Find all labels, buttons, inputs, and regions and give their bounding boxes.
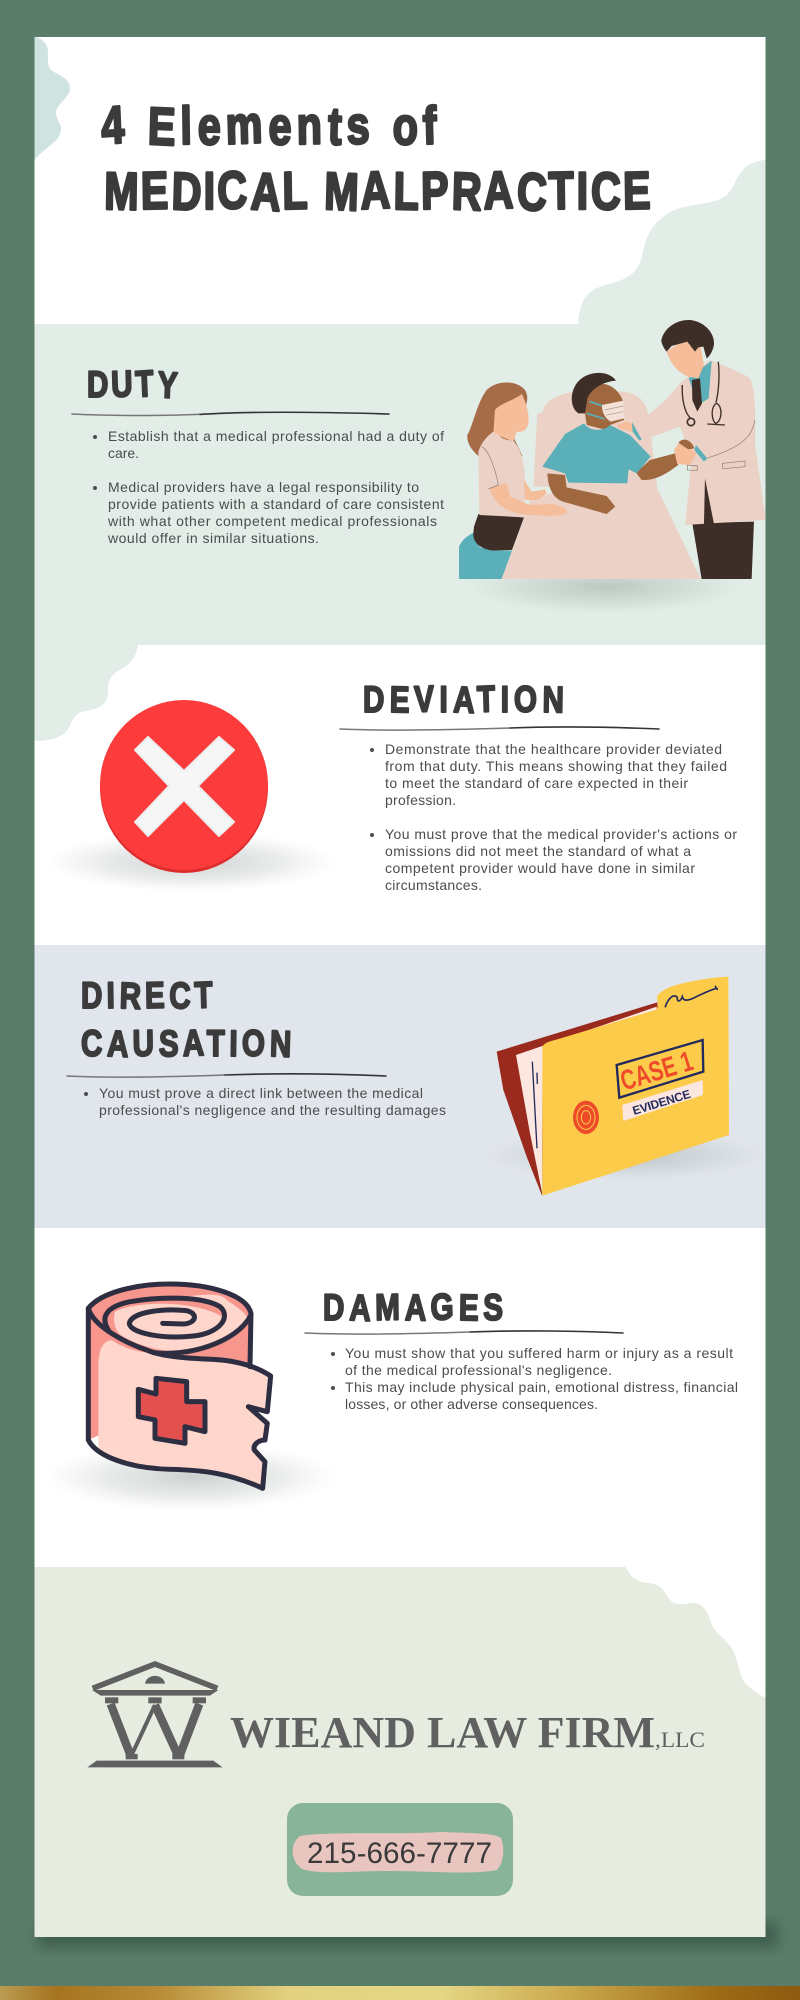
front wrap bbox=[98, 1340, 271, 1488]
companion bbox=[467, 382, 529, 551]
LLC suffix: ,LLC bbox=[655, 1727, 705, 1752]
gold strip bbox=[0, 1986, 800, 2000]
text: deviation bullets: competent provider would have done in similar bbox=[385, 860, 695, 876]
panel: damages bbox=[34, 1228, 766, 1567]
shadow bbox=[44, 832, 338, 892]
phone badge bbox=[287, 1803, 513, 1896]
text: deviation bullets: Demonstrate that the healthcare provider deviated bbox=[385, 741, 722, 757]
footer corner bbox=[625, 1566, 766, 1698]
illustration: doctor, patient and companion bbox=[459, 320, 766, 614]
text: duty bullets: Medical providers have a legal responsibility to bbox=[108, 479, 419, 495]
paper bbox=[516, 1007, 657, 1192]
roll top bbox=[105, 1295, 248, 1352]
brush rule bbox=[305, 1331, 623, 1334]
text: damages bullets: of the medical professional's negligence. bbox=[345, 1362, 612, 1378]
floor shadow bbox=[44, 1443, 338, 1511]
brush rule bbox=[67, 1074, 386, 1077]
illustration: bandage roll bbox=[44, 1284, 338, 1511]
firm name: WIEAND LAW FIRM bbox=[230, 1708, 655, 1757]
text: duty bullets: provide patients with a standard of care consistent bbox=[108, 496, 444, 512]
text: damages bullets bbox=[331, 1345, 738, 1412]
decorative blob: top left bbox=[34, 37, 70, 160]
text: deviation bullets: You must prove that the medical provider's actions or bbox=[385, 826, 737, 842]
panel: footer bbox=[34, 1566, 766, 1937]
text: damages bullets: This may include physical pain, emotional distress, financial bbox=[345, 1379, 738, 1395]
decorative blob: top right bbox=[578, 160, 766, 326]
doctor bbox=[632, 320, 766, 579]
companion arms bbox=[482, 447, 567, 516]
text: duty bullets bbox=[93, 428, 444, 546]
folder back bbox=[497, 1002, 658, 1196]
text: deviation bullets: circumstances. bbox=[385, 877, 482, 893]
pillow and bed head bbox=[533, 390, 657, 488]
text: duty bullets: care. bbox=[108, 445, 139, 461]
floor shadow bbox=[483, 1129, 767, 1181]
panel: direct causation bbox=[34, 945, 767, 1228]
text: deviation bullets: to meet the standard of care expected in their bbox=[385, 775, 688, 791]
stamp bbox=[573, 1101, 599, 1134]
text: duty bullets: would offer in similar situations. bbox=[107, 530, 319, 546]
title line 2: MEDICAL MALPRACTICE bbox=[104, 161, 651, 223]
text: damages bullets: losses, or other adverse consequences. bbox=[345, 1396, 598, 1412]
outline bbox=[88, 1284, 271, 1488]
heading: direct causation: CAUSATION bbox=[81, 1023, 292, 1066]
text: causation bullet bbox=[84, 1085, 446, 1118]
panel: deviation bbox=[34, 644, 766, 945]
stool bbox=[459, 533, 512, 579]
logo bbox=[87, 1664, 705, 1767]
text: duty bullets: Establish that a medical professional had a duty of bbox=[108, 428, 444, 444]
text: deviation bullets: from that duty. This means showing that they failed bbox=[385, 758, 727, 774]
text: deviation bullets: profession. bbox=[385, 792, 456, 808]
card shadow bbox=[38, 1922, 778, 1948]
panel: title bbox=[34, 37, 766, 326]
title line 1: 4 Elements of bbox=[100, 96, 437, 157]
roll body bbox=[88, 1284, 250, 1440]
panel: duty bbox=[34, 320, 766, 645]
text: duty bullets: with what other competent medical professionals bbox=[107, 513, 437, 529]
heading: damages: DAMAGES bbox=[323, 1287, 503, 1330]
heading: direct causation: DIRECT bbox=[81, 975, 214, 1018]
text: causation bullet: You must prove a direct link between the medical bbox=[99, 1085, 423, 1101]
text: causation bullet: professional's negligence and the resulting damages bbox=[99, 1102, 446, 1118]
text: damages bullets: You must show that you suffered harm or injury as a result bbox=[345, 1345, 733, 1361]
text: deviation bullets: omissions did not meet the standard of what a bbox=[385, 843, 691, 859]
text: deviation bullets bbox=[370, 741, 737, 893]
illustration: evidence folder bbox=[483, 977, 767, 1196]
heading: deviation: DEVIATION bbox=[363, 679, 564, 722]
heading: direct causation bbox=[81, 975, 292, 1066]
evidence label bbox=[622, 1080, 703, 1121]
brush rule bbox=[72, 412, 389, 416]
signature bbox=[665, 986, 717, 1007]
red cross icon bbox=[44, 700, 338, 892]
blanket bbox=[502, 482, 701, 579]
icon: courthouse W bbox=[87, 1664, 223, 1767]
heading: duty: DUTY bbox=[87, 364, 178, 407]
phone badge: 215-666-7777 bbox=[307, 1837, 492, 1870]
floor shadow bbox=[465, 559, 745, 614]
cross bbox=[138, 1378, 205, 1443]
folder front bbox=[542, 977, 729, 1196]
brush rule bbox=[340, 727, 659, 730]
evidence label: EVIDENCE bbox=[631, 1087, 692, 1118]
patient bbox=[542, 373, 678, 514]
decorative blob: corner bbox=[34, 644, 138, 741]
case label: CASE 1 bbox=[617, 1045, 696, 1096]
